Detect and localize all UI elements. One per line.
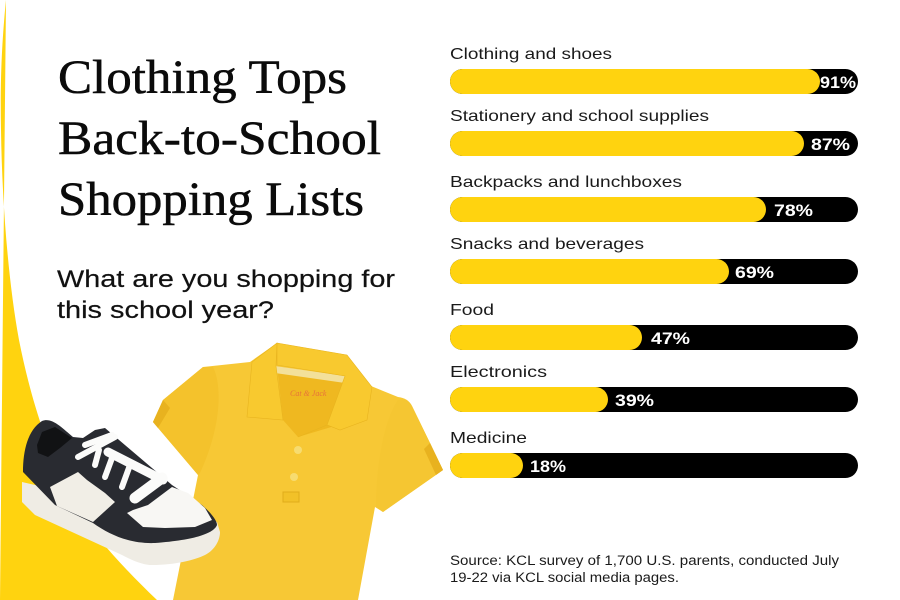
bar: Electronics 39%: 39% xyxy=(615,392,654,410)
bar: Clothing and shoes 91%: 91% xyxy=(820,74,856,92)
icon: black and white sneaker xyxy=(22,420,220,565)
bar: Snacks and beverages 69% xyxy=(450,236,858,284)
subtitle xyxy=(57,266,395,324)
subtitle: What are you shopping for xyxy=(57,266,395,293)
bar: Electronics 39% xyxy=(450,364,858,412)
bar: Backpacks and lunchboxes 78% xyxy=(450,174,858,222)
icon: yellow polo shirt xyxy=(153,343,443,600)
bar: Stationery and school supplies 87%: Stationery and school supplies xyxy=(450,108,709,125)
bar: Backpacks and lunchboxes 78%: Backpacks and lunchboxes xyxy=(450,174,682,191)
bar: Medicine 18% xyxy=(450,430,858,478)
bar: Medicine 18%: Medicine xyxy=(450,430,527,447)
sneaker upper xyxy=(23,420,217,543)
shirt label text: Cat & Jack xyxy=(290,389,327,398)
bar: Stationery and school supplies 87% xyxy=(450,108,858,156)
yellow background curve xyxy=(0,0,157,600)
sneaker collar opening xyxy=(37,427,72,457)
bar: Food 47%: Food xyxy=(450,302,494,319)
sneaker laces xyxy=(78,435,163,498)
bar chart xyxy=(450,46,858,478)
source note xyxy=(450,553,839,585)
bar: Stationery and school supplies 87%: 87% xyxy=(811,136,850,154)
bar: Clothing and shoes 91%: Clothing and shoes xyxy=(450,46,612,63)
title xyxy=(58,51,381,226)
bar: Food 47%: 47% xyxy=(651,330,690,348)
shirt collar xyxy=(247,343,372,437)
shirt neck tape xyxy=(275,366,345,383)
bar: Clothing and shoes 91% xyxy=(450,46,858,94)
sneaker sole xyxy=(22,482,220,565)
title: Clothing Tops xyxy=(58,51,347,104)
title: Back-to-School xyxy=(58,112,381,165)
bar: Backpacks and lunchboxes 78%: 78% xyxy=(774,202,813,220)
bar: Medicine 18%: 18% xyxy=(530,458,566,476)
subtitle: this school year? xyxy=(57,297,274,324)
bar: Snacks and beverages 69%: Snacks and beverages xyxy=(450,236,644,253)
bar: Food 47% xyxy=(450,302,858,350)
sneaker toe panel xyxy=(127,487,212,528)
title: Shopping Lists xyxy=(58,173,364,226)
source note: Source: KCL survey of 1,700 U.S. parents, conducted July xyxy=(450,553,839,568)
bar: Electronics 39%: Electronics xyxy=(450,364,547,381)
bar: Snacks and beverages 69%: 69% xyxy=(735,264,774,282)
source note: 19-22 via KCL social media pages. xyxy=(450,570,679,585)
shirt inner neck xyxy=(277,366,345,437)
sneaker heel panel xyxy=(50,472,115,522)
